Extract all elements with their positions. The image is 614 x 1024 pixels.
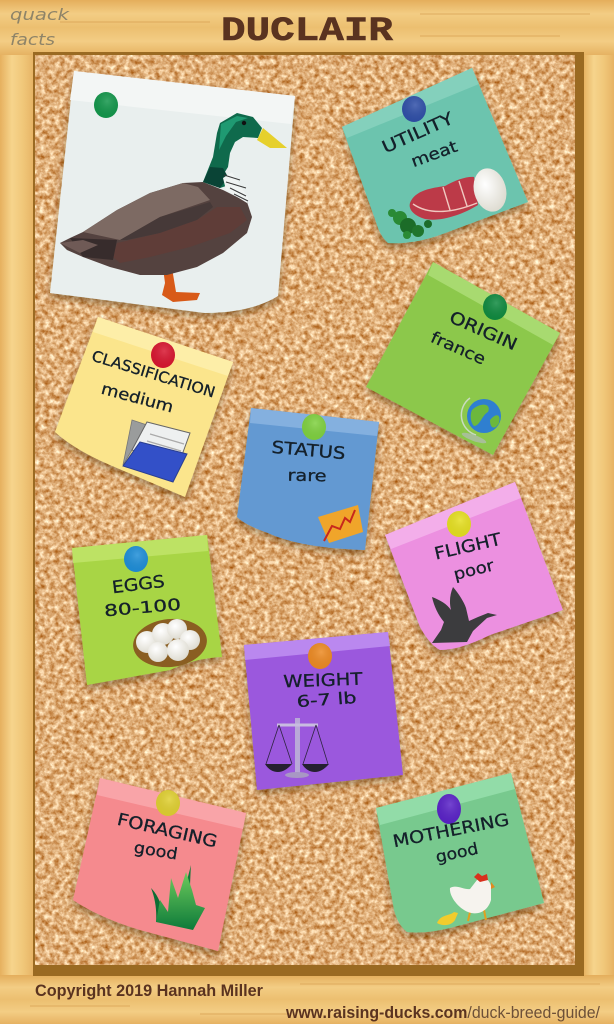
value: france: france [428,328,489,368]
heading: utility: UTILITY [379,109,457,158]
quack facts logo [10,5,70,49]
value: eggs per year: 80-100 [103,595,182,620]
quack facts logo: quack [10,5,70,24]
value: meat: meat [408,137,460,171]
heading: weight: WEIGHT [283,670,363,692]
panel: duck photo note [50,71,295,313]
icon: nest of eggs [131,615,209,671]
icon: grass [151,865,205,930]
pin: light green [302,414,326,440]
copyright text: Copyright 2019 Hannah Miller [35,981,263,1000]
quack facts logo: facts [10,30,55,49]
icon: hen and chick [437,873,495,925]
pin: blue [124,546,148,572]
value: mothering good: good [434,839,480,866]
heading: eggs: EGGS [111,572,166,598]
panel: classification note [55,317,233,497]
icon: duck [60,113,287,302]
heading: foraging: FORAGING [115,810,219,852]
panel: origin note [366,262,560,455]
panel: eggs note [72,535,222,685]
value: poor: poor [451,555,496,584]
pin: red [151,342,175,368]
icon: balance scale [265,718,329,778]
pin: yellow [447,511,471,537]
panel: weight note [244,632,403,790]
panel: flight note [385,482,563,650]
value: weight range: 6-7 lb [296,688,357,711]
panel: foraging note [73,778,246,951]
website url: www.raising-ducks.com/duck-breed-guide/ [285,1003,600,1022]
icon: meat, egg and parsley [388,165,511,239]
heading: classification: CLASSIFICATION [90,347,217,402]
panel: mothering note [376,773,544,932]
pin: dark green [483,294,507,320]
icon: globe [461,398,501,445]
icon: rising chart [318,505,363,543]
value: medium: medium [99,379,176,416]
icon: folder [123,420,190,482]
pin: yellow [156,790,180,816]
heading: status: STATUS [271,438,346,464]
value: rare: rare [287,466,327,485]
heading: flight: FLIGHT [432,530,504,565]
heading: origin: ORIGIN [446,308,520,355]
pin: purple [437,794,461,824]
pin: green [94,92,118,118]
pin: orange [308,643,332,669]
pin: blue [402,96,426,122]
heading: mothering: MOTHERING [391,810,511,852]
value: foraging good: good [133,838,179,863]
panel: status note [237,408,379,550]
icon: flying duck silhouette [432,587,497,643]
title: DUCLAIR [221,13,394,51]
panel: utility note [342,68,528,243]
